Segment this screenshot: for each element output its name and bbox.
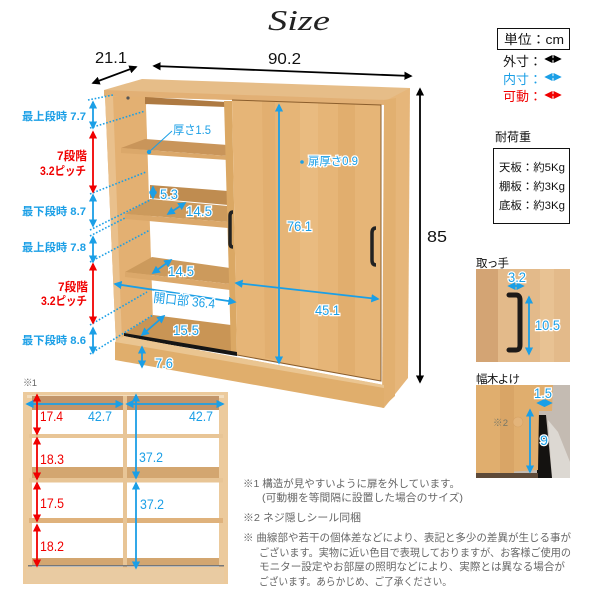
- notes: [243, 477, 571, 588]
- bottom shelf depth 15.5: [142, 316, 199, 338]
- adjustable range lower: 3.2ピッチ: [41, 294, 87, 308]
- movable key: 可動：: [503, 89, 542, 104]
- notes: モニター設定やお部屋の照明などにより、実際とは異なる場合が: [259, 560, 565, 573]
- bottom range 8.6: 最下段時 8.6: [22, 333, 86, 347]
- notes: ございます。あらかじめ、ご了承ください。: [259, 575, 452, 588]
- seal note: ※2: [493, 418, 508, 429]
- adjustable range upper: 3.2ピッチ: [40, 164, 86, 178]
- load table: 棚板：約3Kg: [499, 179, 565, 193]
- legend: units: 単位：cm: [504, 32, 564, 47]
- shelf gap 17.4: 17.4: [40, 408, 63, 424]
- handle width 3.2: 3.2: [508, 269, 526, 285]
- shelf thickness 1.5: [147, 123, 211, 154]
- shelf gap 17.5: [37, 483, 64, 521]
- dimension 5.3: 5.3: [160, 186, 178, 202]
- outer dimension: width 90.2: [154, 51, 411, 76]
- outer dimension: width 90.2: 90.2: [268, 51, 301, 68]
- shelf depth 14.5 lower: [153, 260, 194, 279]
- inner size key: 内寸：: [503, 72, 542, 87]
- clearance 1.5: 1.5: [534, 385, 552, 401]
- note marker ※1: ※1: [23, 378, 37, 389]
- title: Size: [268, 5, 330, 37]
- shelf depth 14.5 upper: [168, 203, 212, 219]
- icon: handle: [509, 295, 520, 350]
- inner height 37.2 upper: 37.2: [139, 449, 163, 465]
- load table: [494, 148, 570, 224]
- shelf gap 18.3: [37, 438, 64, 479]
- inner width right 42.7: 42.7: [189, 408, 213, 424]
- handle length 10.5: 10.5: [535, 317, 560, 333]
- shelf depth 14.5 lower: 14.5: [168, 263, 194, 279]
- inner width left 42.7: 42.7: [88, 408, 112, 424]
- outer dimension: depth 21.1: [93, 50, 136, 83]
- adjustable range lower: [41, 264, 93, 323]
- door height 76.1: 76.1: [287, 218, 312, 234]
- top range 7.8: 最上段時 7.8: [22, 240, 86, 254]
- top range 7.7: 最上段時 7.7: [22, 109, 86, 123]
- outer size key: 外寸：: [503, 54, 542, 69]
- icon: door handle right: [372, 228, 376, 265]
- base height 7.6: [142, 347, 173, 371]
- heading: 幅木よけ: [476, 373, 520, 386]
- inner height 37.2 lower: [136, 483, 164, 568]
- opening width 36.4: 開口部 36.4: [153, 290, 216, 311]
- base height 7.6: 7.6: [155, 355, 173, 371]
- inner height 37.2 upper: [136, 395, 163, 478]
- shelf depth 14.5 upper: 14.5: [186, 203, 212, 219]
- cabinet illustration: [104, 79, 410, 408]
- outer dimension: height 85: 85: [427, 229, 447, 246]
- shelf gap 18.2: 18.2: [40, 538, 64, 554]
- shelf gap 17.5: 17.5: [40, 495, 64, 511]
- left shelf position dimensions: [22, 95, 153, 354]
- adjustable range upper: [40, 132, 93, 192]
- adjustable range lower: 7段階: [58, 280, 88, 294]
- inner dimensions on shelves: [115, 105, 378, 371]
- outer dimension: depth 21.1: 21.1: [95, 50, 127, 67]
- dimension 5.3: [153, 186, 178, 202]
- notes: ございます。実物に近い色目で表現しておりますが、お客様ご使用の: [259, 546, 571, 559]
- heading: 耐荷重: [495, 130, 531, 144]
- heading: 取っ手: [476, 256, 509, 270]
- top range 7.8: [22, 237, 93, 262]
- shelf gap 18.2: [37, 525, 64, 566]
- panel: baseboard clearance: [476, 373, 570, 478]
- door thickness 0.9: 扉厚さ0.9: [308, 155, 358, 168]
- top range 7.7: [22, 102, 93, 128]
- clearance 9: 9: [540, 432, 548, 448]
- load table: 底板：約3Kg: [499, 198, 565, 212]
- front view without doors: [23, 392, 228, 584]
- notes: ※ 曲線部や若干の個体差などにより、表記と多少の差異が生じる事が: [243, 531, 571, 544]
- opening width 36.4: [115, 284, 235, 311]
- shelf thickness 1.5: 厚さ1.5: [173, 123, 211, 137]
- shelf gap 17.4: [37, 395, 63, 434]
- icon: door handle left: [230, 212, 233, 247]
- door width 45.1: 45.1: [315, 302, 340, 318]
- notes: ※1 構造が見やすいように扉を外しています。: [243, 477, 460, 490]
- bottom range 8.7: 最下段時 8.7: [22, 204, 86, 218]
- shelf gap 18.3: 18.3: [40, 451, 64, 467]
- legend: units: [498, 28, 570, 104]
- door width 45.1: [236, 283, 378, 318]
- inner width left 42.7: [27, 404, 122, 424]
- bottom range 8.6: [22, 328, 93, 353]
- inner width right 42.7: [127, 404, 223, 424]
- panel: handle: [476, 256, 570, 362]
- load table: 天板：約5Kg: [499, 160, 565, 174]
- load capacity: [494, 130, 570, 224]
- inner height 37.2 lower: 37.2: [140, 496, 164, 512]
- notes: ※2 ネジ隠しシール同梱: [243, 511, 361, 524]
- bottom shelf depth 15.5: 15.5: [173, 322, 199, 338]
- bottom range 8.7: [22, 195, 93, 226]
- notes: (可動棚を等間隔に設置した場合のサイズ): [262, 491, 463, 504]
- adjustable range upper: 7段階: [57, 149, 87, 163]
